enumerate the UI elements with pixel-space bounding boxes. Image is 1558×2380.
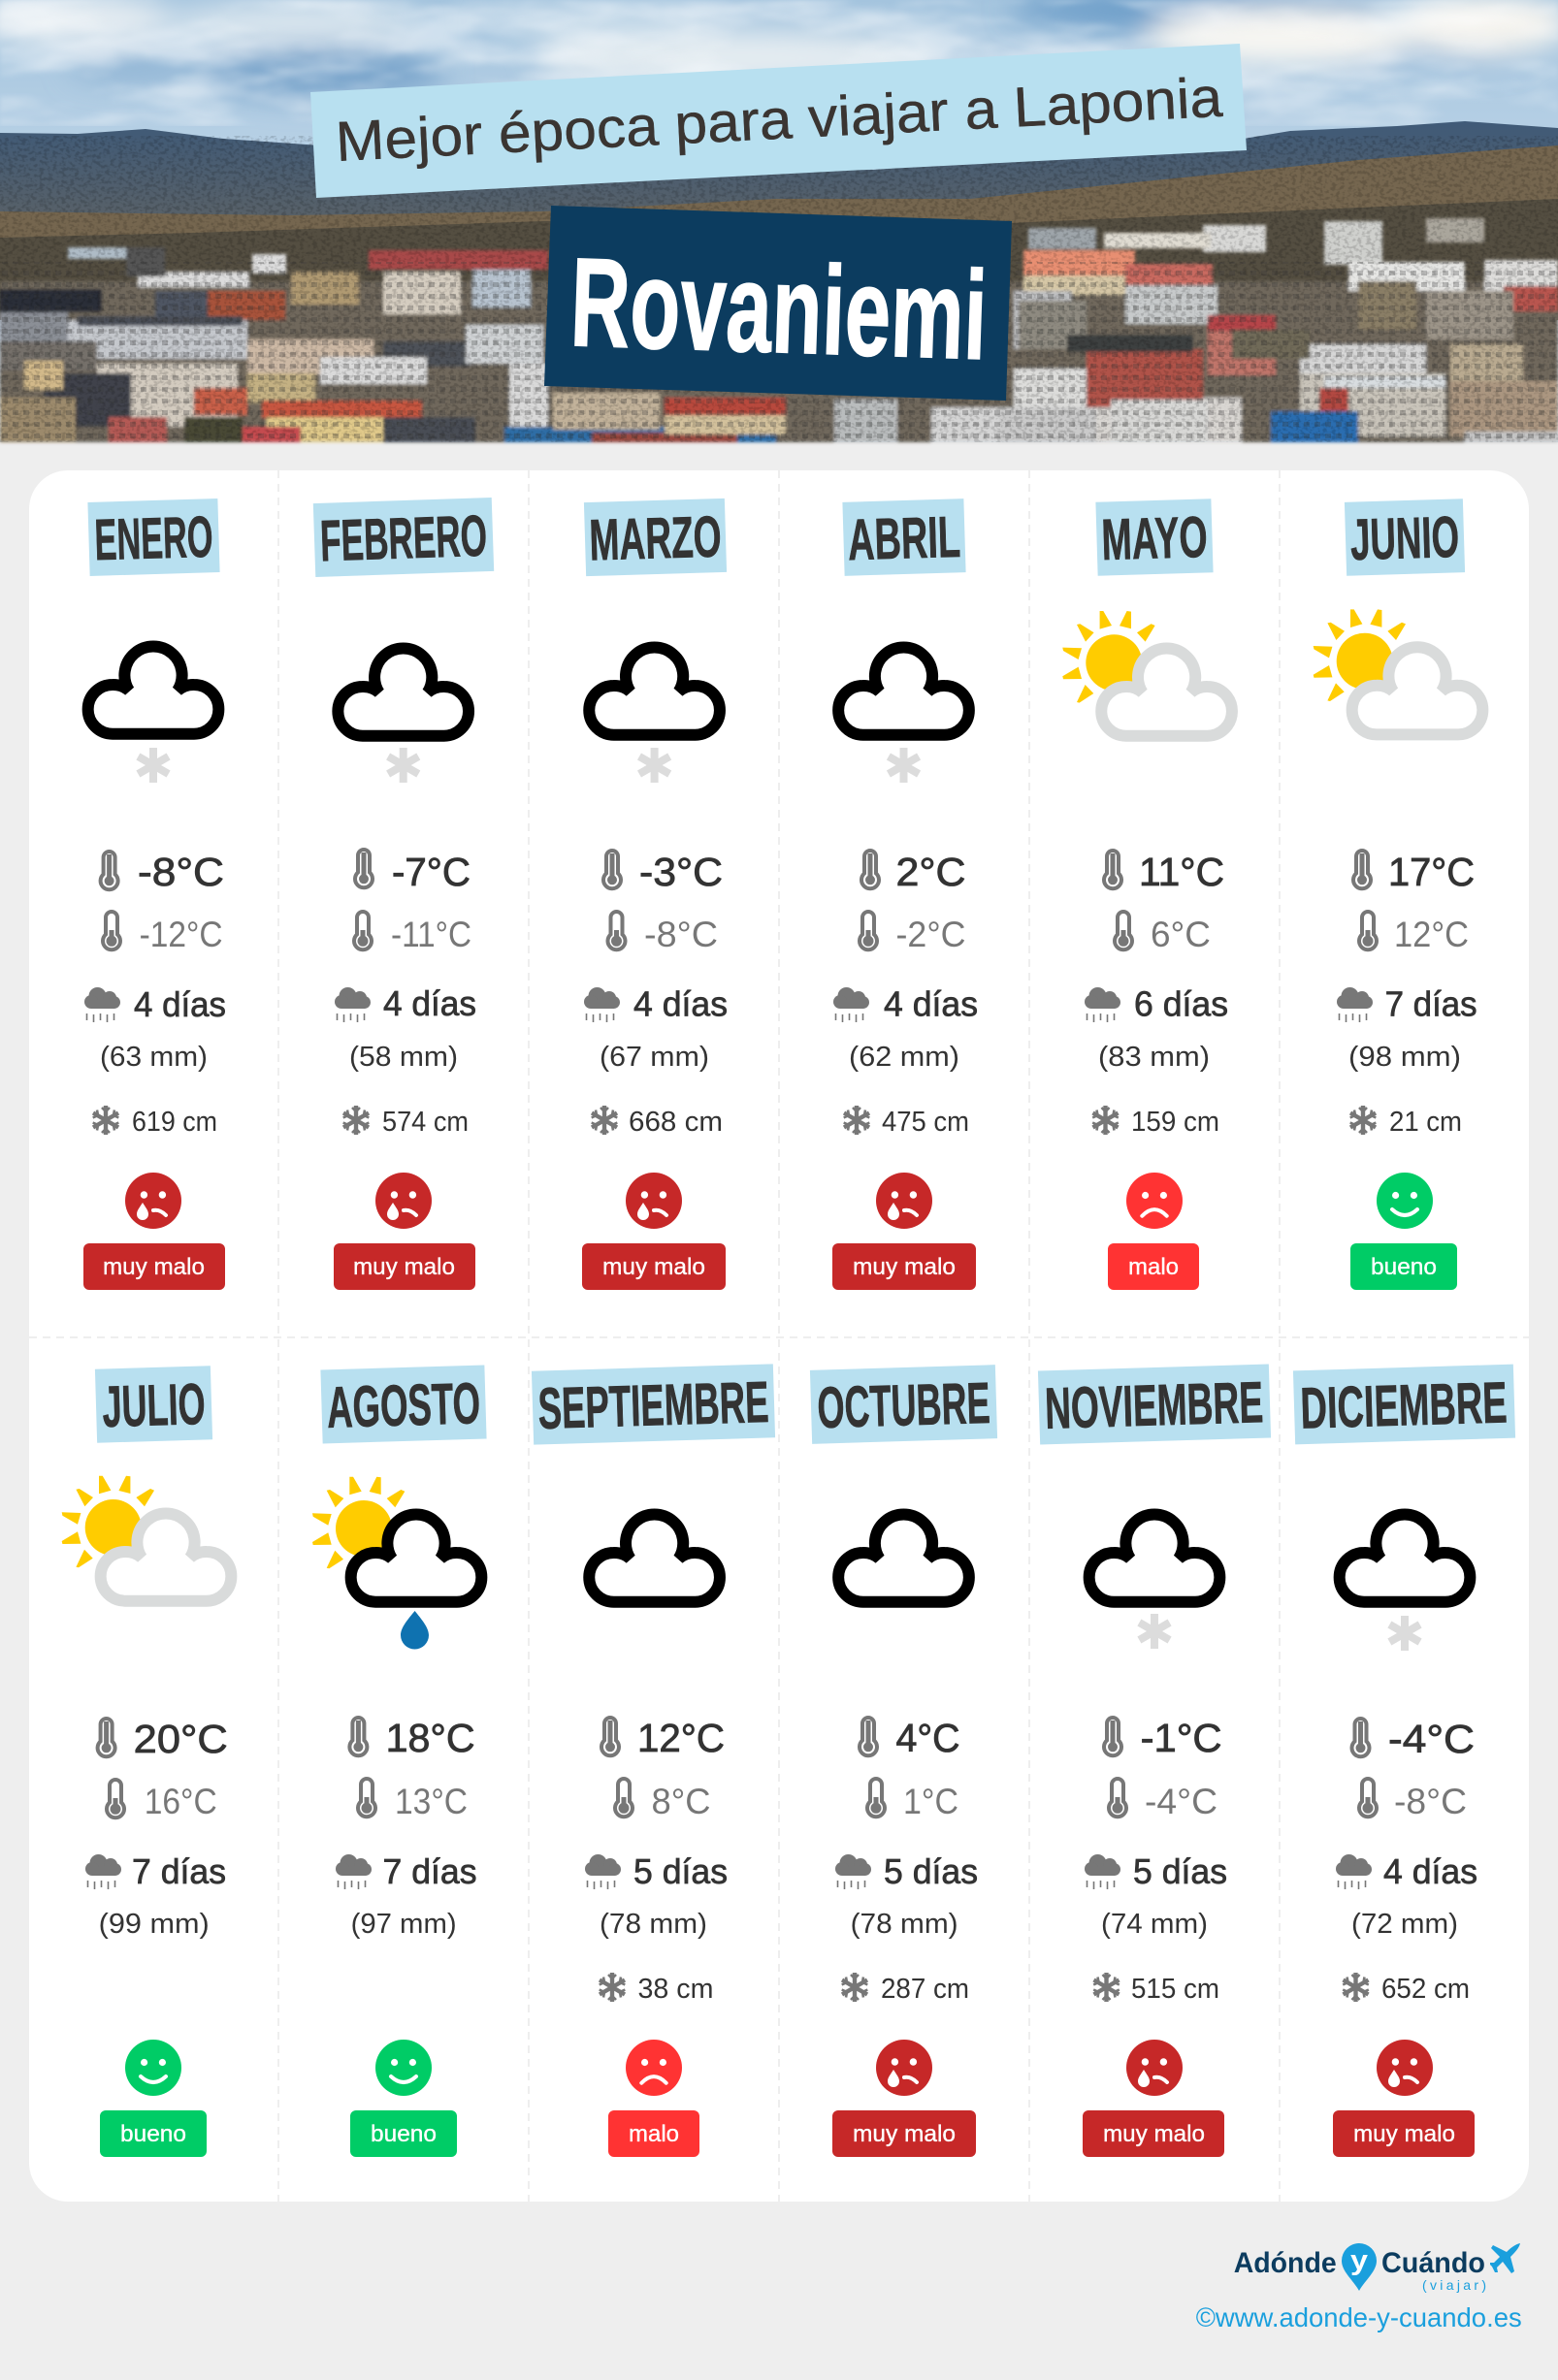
icon: sun and grey cloud [1314, 609, 1482, 734]
logo: Adónde y Cuándo [1234, 2243, 1520, 2293]
icon: very bad face [375, 1173, 432, 1229]
rainfall: (78 mm) [600, 1909, 707, 1940]
minimum temperature [1109, 1779, 1217, 1821]
rating: muy malo: muy malo [1353, 2121, 1455, 2147]
minimum temperature: -12°C [140, 915, 223, 954]
rating: malo: malo [629, 2121, 679, 2147]
maximum temperature: 2°C [896, 850, 966, 894]
maximum temperature [603, 850, 723, 894]
icon: sun and grey cloud [62, 1476, 231, 1601]
rating: bueno [350, 2110, 457, 2157]
rating: muy malo [83, 1243, 225, 1290]
rating: bueno: bueno [371, 2121, 437, 2147]
rating: malo [1108, 1243, 1199, 1290]
minimum temperature: -8°C [644, 915, 718, 954]
snowfall: 159 cm [1131, 1107, 1219, 1138]
rain days [585, 1851, 728, 1891]
icon: map pin: y [1350, 2245, 1368, 2276]
rain days [336, 1851, 477, 1891]
maximum temperature: 18°C [386, 1716, 475, 1760]
icon: sun and grey cloud [1062, 611, 1232, 736]
month: mayo [1062, 499, 1232, 1290]
icon: very bad face [125, 1173, 181, 1229]
snowfall [844, 1106, 969, 1138]
heading: noviembre [1038, 1364, 1271, 1445]
header photo: Rovaniemi townscape [0, 0, 1558, 442]
icon: very bad face [876, 2040, 932, 2096]
month: abril [832, 499, 978, 1290]
maximum temperature [101, 850, 224, 894]
rain days [835, 1851, 978, 1891]
snowfall [1343, 1973, 1470, 2005]
heading: septiembre [532, 1364, 775, 1445]
rating: bueno [1350, 1243, 1457, 1290]
snowfall [93, 1106, 217, 1138]
minimum temperature: -2°C [896, 915, 966, 954]
maximum temperature [860, 1716, 960, 1760]
logo: Adónde y Cuándo: (viajar) [1422, 2277, 1486, 2293]
snowfall [1092, 1106, 1219, 1138]
maximum temperature: 4°C [896, 1716, 960, 1760]
snowfall [1350, 1106, 1462, 1138]
rainfall: (98 mm) [1348, 1042, 1461, 1073]
icon: plane [1490, 2243, 1520, 2273]
rainfall: (78 mm) [851, 1909, 958, 1940]
snowfall: 38 cm [638, 1974, 714, 2005]
rain days [1085, 983, 1228, 1024]
minimum temperature [354, 912, 471, 954]
snowfall [600, 1973, 714, 2005]
icon: cloud with snow [1340, 1515, 1470, 1651]
subtitle banner: Mejor época para viajar a Laponia [334, 66, 1224, 174]
city title banner [544, 206, 1012, 401]
heading: enero [87, 499, 220, 576]
rain days: 7 días [132, 1851, 226, 1891]
rain days: 5 días [633, 1851, 728, 1891]
icon: very bad face [626, 1173, 682, 1229]
rain days: 5 días [884, 1851, 978, 1891]
rating: bueno [100, 2110, 207, 2157]
month: noviembre [1038, 1364, 1271, 2157]
heading: octubre [810, 1365, 997, 1444]
heading: julio [95, 1366, 212, 1443]
rainfall: (97 mm) [351, 1909, 457, 1940]
icon: good face [375, 2040, 432, 2096]
maximum temperature [355, 850, 471, 894]
minimum temperature: -8°C [1394, 1782, 1467, 1821]
heading: marzo: MARZO [589, 503, 722, 573]
icon: black cloud [838, 1515, 969, 1602]
icon: cloud with snow [88, 647, 218, 783]
maximum temperature [861, 850, 966, 894]
rain days [833, 983, 978, 1024]
icon: very bad face [876, 1173, 932, 1229]
icon: black cloud [589, 1515, 720, 1602]
maximum temperature: -7°C [392, 850, 471, 894]
rating: muy malo: muy malo [602, 1254, 705, 1280]
snowfall [842, 1973, 969, 2005]
heading: junio: JUNIO [1349, 504, 1460, 572]
month: diciembre [1293, 1365, 1515, 2157]
subtitle banner [310, 44, 1247, 198]
maximum temperature [1353, 850, 1475, 894]
snowfall: 619 cm [132, 1107, 217, 1138]
rainfall: (83 mm) [1098, 1042, 1210, 1073]
rainfall: (63 mm) [100, 1042, 208, 1073]
website credit: ©www.adonde-y-cuando.es [1196, 2302, 1522, 2332]
heading: abril: ABRIL [847, 504, 961, 572]
heading: febrero: FEBRERO [319, 503, 488, 573]
minimum temperature: -11°C [391, 915, 471, 954]
minimum temperature [607, 912, 718, 954]
rain days [85, 1851, 226, 1891]
heading: septiembre: SEPTIEMBRE [537, 1369, 769, 1441]
heading: agosto: AGOSTO [326, 1370, 481, 1440]
icon: good face [125, 2040, 181, 2096]
maximum temperature: 17°C [1388, 850, 1475, 894]
icon: bad face [1126, 1173, 1183, 1229]
icon: sun, black cloud and rain drop [312, 1477, 481, 1649]
month: octubre [810, 1365, 997, 2157]
snowfall [1093, 1973, 1219, 2005]
rating: muy malo: muy malo [353, 1254, 455, 1280]
minimum temperature: 1°C [903, 1782, 958, 1821]
snowfall: 475 cm [882, 1107, 969, 1138]
maximum temperature: 12°C [637, 1716, 725, 1760]
rainfall: (72 mm) [1351, 1909, 1458, 1940]
logo: Adónde y Cuándo: Adónde [1234, 2247, 1337, 2279]
icon: cloud with snow [838, 648, 969, 783]
heading: junio [1345, 499, 1465, 576]
minimum temperature: -4°C [1145, 1782, 1217, 1821]
rainfall: (99 mm) [99, 1909, 210, 1940]
rain days [1085, 1851, 1227, 1891]
rain days [1336, 1851, 1477, 1891]
logo: Adónde y Cuándo: Cuándo [1381, 2247, 1485, 2279]
rain days [84, 984, 226, 1024]
rainfall: (67 mm) [600, 1042, 709, 1073]
month: febrero [313, 498, 494, 1290]
icon: cloud with snow [338, 649, 469, 783]
rating: muy malo [832, 1243, 976, 1290]
minimum temperature [860, 912, 966, 954]
rain days: 4 días [383, 983, 476, 1023]
icon: map pin [1342, 2243, 1377, 2291]
icon: cloud with snow [1089, 1515, 1219, 1649]
rain days [1337, 983, 1477, 1024]
snowfall [592, 1106, 723, 1138]
month: junio [1314, 499, 1482, 1290]
rainfall: (74 mm) [1101, 1909, 1208, 1940]
minimum temperature [358, 1779, 468, 1821]
rating: muy malo: muy malo [853, 1254, 956, 1280]
snowfall: 515 cm [1131, 1974, 1219, 2005]
minimum temperature: 8°C [652, 1782, 710, 1821]
icon: good face [1377, 1173, 1433, 1229]
minimum temperature [615, 1779, 710, 1821]
rain days: 4 días [633, 983, 728, 1024]
snowfall [343, 1106, 469, 1138]
city title banner: Rovaniemi [568, 231, 990, 386]
rain days: 4 días [884, 983, 978, 1024]
maximum temperature: 11°C [1139, 850, 1224, 894]
minimum temperature: 12°C [1394, 915, 1469, 954]
month: enero [83, 499, 226, 1290]
snowfall: 652 cm [1381, 1974, 1470, 2005]
rainfall: (58 mm) [349, 1042, 458, 1073]
minimum temperature [107, 1780, 217, 1821]
minimum temperature: 13°C [395, 1782, 468, 1821]
rain days: 4 días [134, 984, 226, 1024]
rain days: 5 días [1133, 1851, 1227, 1891]
rating: muy malo: muy malo [853, 2121, 956, 2147]
rating: muy malo: muy malo [1103, 2121, 1205, 2147]
month: marzo [582, 499, 728, 1290]
minimum temperature: 16°C [145, 1782, 217, 1821]
maximum temperature [1104, 1716, 1222, 1760]
icon: very bad face [1377, 2040, 1433, 2096]
minimum temperature [1359, 1779, 1467, 1821]
rating: malo: malo [1128, 1254, 1179, 1280]
rain days: 7 días [1385, 983, 1477, 1024]
month: julio [62, 1366, 231, 2157]
panel: months card [29, 470, 1529, 2202]
maximum temperature: -8°C [138, 850, 224, 894]
icon: bad face [626, 2040, 682, 2096]
maximum temperature [601, 1716, 725, 1760]
maximum temperature [98, 1717, 228, 1761]
maximum temperature: -3°C [639, 850, 723, 894]
rating: muy malo [1333, 2110, 1475, 2157]
rating: bueno: bueno [1371, 1254, 1437, 1280]
minimum temperature [1359, 912, 1469, 954]
rain days: 7 días [382, 1851, 477, 1891]
rating: muy malo [1083, 2110, 1224, 2157]
minimum temperature [867, 1779, 958, 1821]
month: septiembre [532, 1364, 775, 2157]
rain days: 4 días [1383, 1851, 1477, 1891]
rating: bueno: bueno [120, 2121, 186, 2147]
rating: muy malo [582, 1243, 726, 1290]
heading: mayo [1095, 499, 1214, 576]
icon: cloud with snow [589, 648, 720, 783]
rain days: 6 días [1134, 983, 1228, 1024]
heading: marzo [584, 499, 727, 576]
maximum temperature [1352, 1717, 1475, 1761]
heading: febrero [313, 498, 494, 577]
rating: muy malo: muy malo [103, 1254, 205, 1280]
heading: enero: ENERO [94, 504, 213, 572]
snowfall: 574 cm [382, 1107, 469, 1138]
rain days [335, 983, 476, 1023]
rating: malo [608, 2110, 699, 2157]
maximum temperature: 20°C [134, 1717, 228, 1761]
maximum temperature: -4°C [1388, 1717, 1475, 1761]
minimum temperature [103, 912, 223, 954]
rain days [584, 983, 728, 1024]
snowfall: 21 cm [1389, 1107, 1462, 1138]
snowfall: 668 cm [629, 1107, 723, 1138]
minimum temperature: 6°C [1151, 915, 1211, 954]
icon: very bad face [1126, 2040, 1183, 2096]
rainfall: (62 mm) [849, 1042, 959, 1073]
rating: muy malo [334, 1243, 475, 1290]
heading: julio: JULIO [102, 1371, 207, 1439]
heading: octubre: OCTUBRE [817, 1370, 990, 1440]
heading: noviembre: NOVIEMBRE [1044, 1369, 1264, 1441]
maximum temperature: -1°C [1141, 1716, 1222, 1760]
rating: muy malo [832, 2110, 976, 2157]
heading: mayo: MAYO [1101, 504, 1208, 572]
month: agosto [312, 1366, 487, 2157]
snowfall: 287 cm [881, 1974, 969, 2005]
heading: abril [842, 499, 966, 576]
minimum temperature [1115, 912, 1211, 954]
heading: agosto [320, 1366, 487, 1443]
